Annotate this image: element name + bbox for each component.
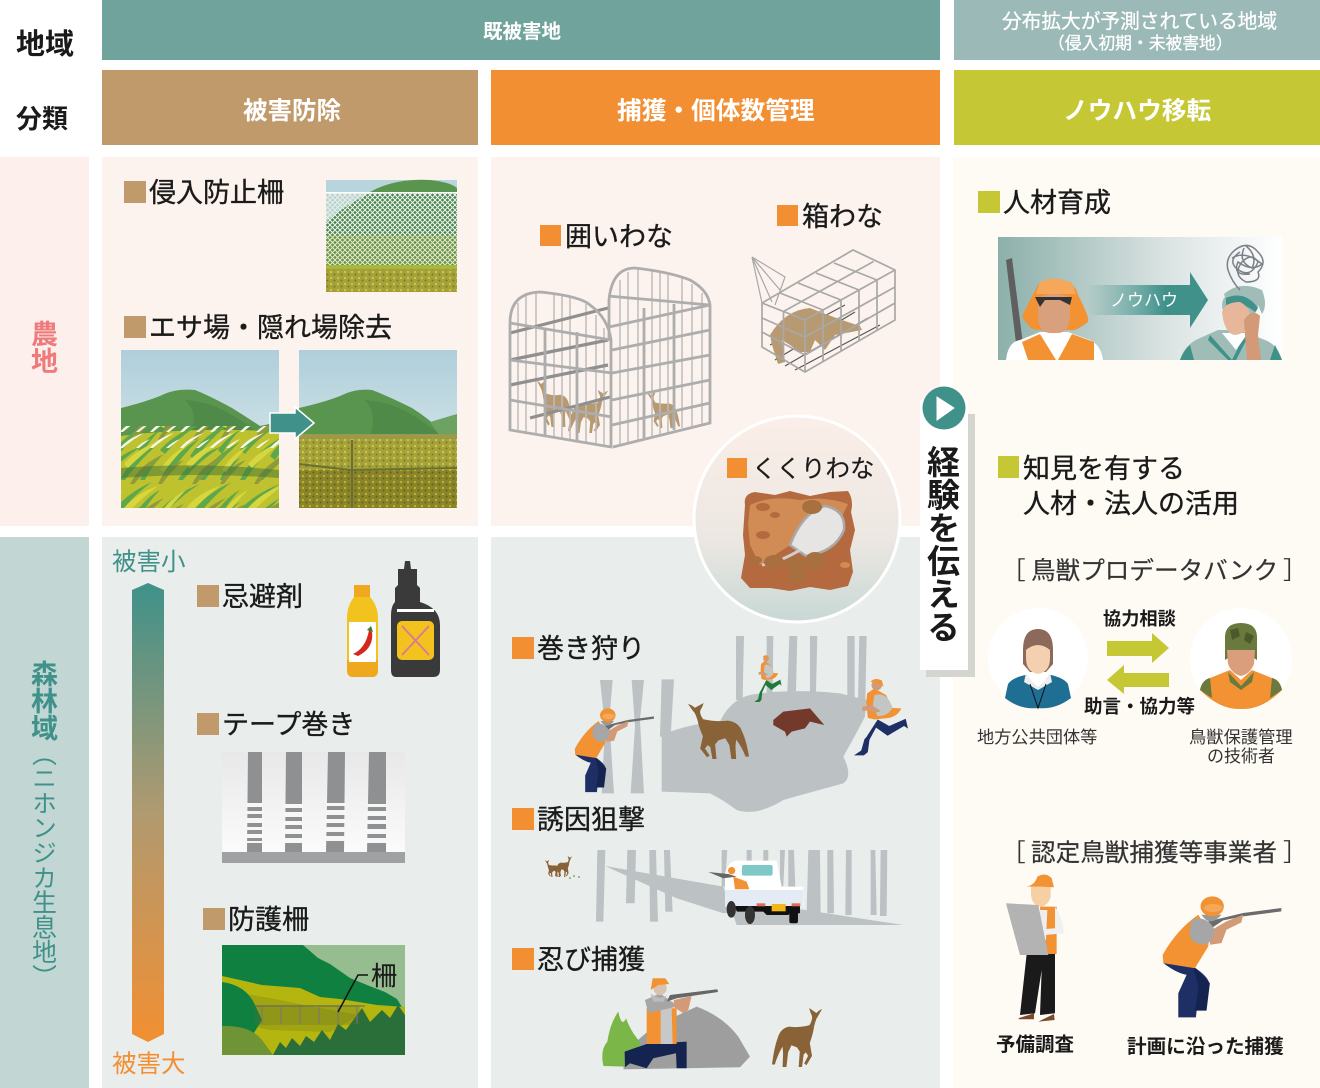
category: capture and population control	[491, 70, 940, 145]
illustration: protective fence in forest: 柵	[371, 961, 397, 991]
category: know-how transfer	[954, 70, 1320, 145]
header label: category: 分類	[16, 104, 68, 134]
header: predicted area: 分布拡大が予測されている地域	[1002, 11, 1277, 33]
subheading: certified operators: ］	[1283, 840, 1308, 867]
row label: farmland	[0, 157, 89, 526]
heading: human resources development: 人材育成	[1003, 188, 1111, 218]
header: damaged area: 既被害地	[483, 21, 562, 43]
panel: forest prevention	[102, 537, 478, 1088]
header: predicted area: （侵入初期・未被害地）	[1048, 34, 1233, 53]
panel: forest capture	[491, 537, 940, 1088]
label panel: pass on experience: 経験を伝える	[922, 445, 960, 643]
panel: farmland prevention	[102, 157, 478, 526]
subheading: wildlife pro data bank: ］	[1283, 558, 1308, 585]
icon: hunter aiming	[1163, 896, 1281, 1017]
heading: lure sniping: 誘因狙撃	[537, 805, 645, 835]
illustration: field before	[121, 350, 279, 508]
heading: enclosure trap: 囲いわな	[565, 222, 673, 252]
illustration: box trap	[752, 250, 895, 372]
arrow: cooperation request	[1107, 633, 1169, 663]
label: cooperation consultation: 協力相談	[1103, 609, 1176, 629]
illustration: protective fence in forest	[222, 945, 405, 1055]
heading: intrusion fence: 侵入防止柵	[149, 178, 284, 208]
heading: use of experts: 知見を有する	[1023, 454, 1185, 484]
label: small damage: 被害小	[112, 548, 186, 576]
heading: tape wrapping: テープ巻き	[222, 710, 355, 740]
label: wildlife technician	[1189, 727, 1293, 766]
illustration: lure sniping scene	[545, 850, 903, 925]
header: predicted area	[954, 0, 1320, 60]
header: damaged area	[102, 0, 940, 60]
arrow: advice and cooperation	[1107, 665, 1169, 694]
label: wildlife technician: 鳥獣保護管理	[1189, 727, 1293, 747]
heading: protective fence: 防護柵	[228, 905, 309, 935]
icon: person reading a map	[1006, 874, 1064, 1022]
heading: use of experts	[998, 454, 1239, 519]
illustration: know-how transfer	[998, 237, 1282, 360]
panel: farmland capture	[491, 157, 940, 526]
label: planned capture: 計画に沿った捕獲	[1127, 1035, 1284, 1058]
panel: know-how transfer	[953, 157, 1320, 1088]
heading: repellent: 忌避剤	[222, 582, 303, 612]
callout: snare trap circle: くくりわな	[752, 456, 874, 483]
icon: municipality officer	[988, 608, 1088, 708]
label: advice cooperation: 助言・協力等	[1084, 696, 1195, 717]
label: large damage: 被害大	[112, 1050, 186, 1078]
heading: feeding place removal: エサ場・隠れ場除去	[149, 313, 392, 343]
subheading: certified operators: 認定鳥獣捕獲等事業者	[1031, 839, 1277, 867]
illustration: drive hunting scene	[575, 636, 908, 812]
category: know-how transfer: ノウハウ移転	[1063, 97, 1211, 125]
illustration: repellent bottles	[347, 561, 440, 677]
illustration: enclosure trap	[510, 268, 710, 447]
label: local government: 地方公共団体等	[977, 727, 1097, 747]
row label: forest area	[0, 537, 89, 1088]
category: capture and population control: 捕獲・個体数管理	[617, 97, 815, 125]
row label: forest area: 森林域 （ニホンジカ生息地）	[27, 660, 58, 989]
illustration: tape on trees	[222, 752, 405, 863]
label: preliminary survey: 予備調査	[996, 1034, 1074, 1056]
illustration: field after	[299, 350, 457, 508]
header label: region: 地域	[16, 28, 74, 61]
heading: drive hunting: 巻き狩り	[537, 634, 645, 664]
illustration: stalking scene	[602, 978, 750, 1069]
category: damage prevention: 被害防除	[243, 97, 341, 125]
callout: snare trap circle	[694, 416, 900, 622]
category: damage prevention	[102, 70, 478, 145]
heading: use of experts: 人材・法人の活用	[1023, 489, 1239, 519]
damage scale arrow	[132, 583, 164, 1042]
icon: wildlife technician	[1190, 608, 1292, 710]
illustration: know-how transfer: ノウハウ	[1110, 291, 1178, 310]
arrow: before to after	[270, 407, 314, 439]
label panel: pass on experience	[920, 386, 975, 677]
row label: farmland: 農地	[27, 320, 58, 374]
heading: stalking: 忍び捕獲	[537, 945, 645, 975]
heading: box trap: 箱わな	[802, 202, 883, 232]
subheading: wildlife pro data bank: ［	[1001, 557, 1026, 585]
label: wildlife technician: の技術者	[1207, 747, 1275, 766]
illustration: net fence	[326, 180, 457, 292]
subheading: wildlife pro data bank: 鳥獣プロデータバンク	[1031, 557, 1278, 585]
subheading: certified operators: ［	[1001, 839, 1026, 867]
